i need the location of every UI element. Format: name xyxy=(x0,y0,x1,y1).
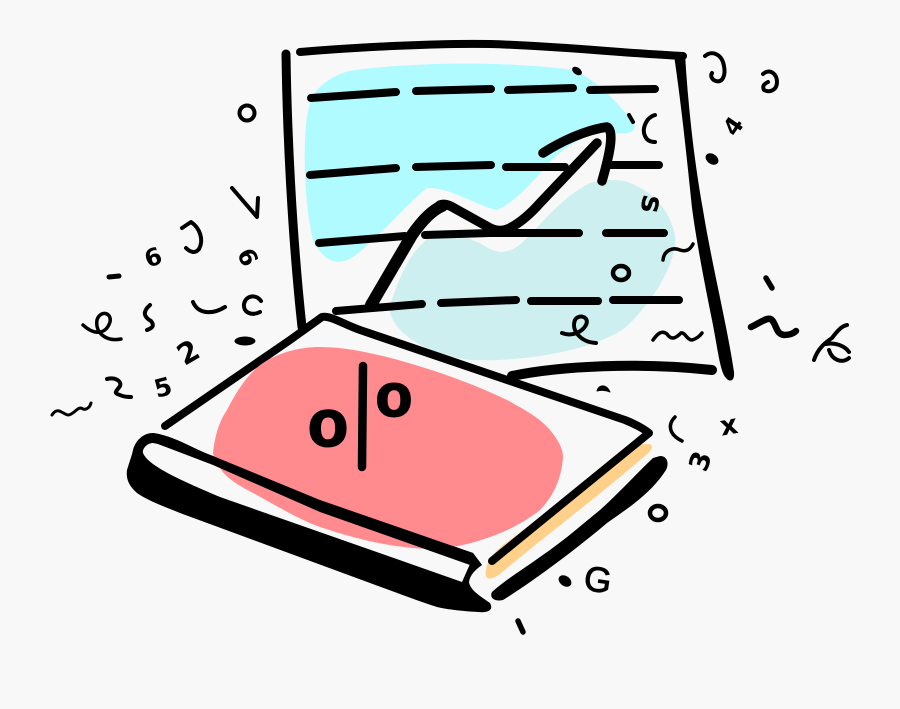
wave xyxy=(653,332,702,340)
dome mark xyxy=(597,386,610,392)
percent upper ring: o xyxy=(376,362,412,429)
j mark xyxy=(182,222,201,252)
teal colour blob xyxy=(390,180,675,360)
ring xyxy=(650,506,666,520)
spine upper stroke xyxy=(153,433,482,565)
numeral 4 rotated: 4 xyxy=(717,111,750,141)
book spine black xyxy=(127,433,491,612)
dot xyxy=(556,573,574,589)
red colour blob xyxy=(213,347,563,549)
v mark xyxy=(232,188,258,217)
curly mark xyxy=(814,325,849,361)
panel: chart sheet xyxy=(286,44,734,380)
oval dot xyxy=(234,336,256,346)
percent sign xyxy=(308,362,412,467)
sheet top edge xyxy=(300,44,683,56)
numeral s rotated: s xyxy=(633,192,670,216)
curly mark xyxy=(562,317,596,343)
tick xyxy=(766,278,772,288)
tick xyxy=(518,621,523,632)
cyan colour blob xyxy=(305,64,635,262)
tick xyxy=(629,115,633,122)
numeral 5: 5 xyxy=(151,371,175,404)
table rows of dashes xyxy=(310,88,679,311)
numeral 3 rotated: 3 xyxy=(683,447,719,476)
sheet right edge xyxy=(674,54,734,380)
doodles: scattered numerals left xyxy=(52,106,261,415)
s mark xyxy=(145,305,153,330)
tilde mark xyxy=(107,378,131,397)
numeral 2: 2 xyxy=(171,333,205,372)
smile mark xyxy=(193,302,225,312)
reverse c top xyxy=(705,53,725,81)
percent bar xyxy=(362,366,363,467)
letter x: x xyxy=(718,409,740,443)
orange page edge xyxy=(486,444,652,579)
letter G: G xyxy=(582,559,614,601)
sheet bottom edge xyxy=(512,366,712,376)
big tilde xyxy=(751,319,796,335)
dot xyxy=(703,151,721,167)
dot xyxy=(570,65,584,77)
paren mark xyxy=(670,417,682,441)
wave xyxy=(52,403,91,415)
c mark xyxy=(644,115,655,142)
panel: book xyxy=(127,317,668,612)
curly mark xyxy=(83,313,121,340)
book spine white highlight xyxy=(143,443,470,582)
rising trend arrow xyxy=(371,127,611,305)
book far edge thick stroke xyxy=(491,456,668,601)
sheet left edge xyxy=(286,54,302,327)
ring xyxy=(613,266,629,280)
book cover outline xyxy=(165,317,649,561)
doodles: scattered numerals right xyxy=(518,53,849,632)
dash xyxy=(109,276,119,277)
ring xyxy=(240,106,254,120)
numeral 6 rotated: 6 xyxy=(231,244,264,271)
numeral 6: 6 xyxy=(141,242,166,274)
percent lower ring: o xyxy=(308,386,348,460)
tilde xyxy=(663,244,693,260)
c mark xyxy=(244,296,261,314)
reverse c ring xyxy=(763,72,777,91)
